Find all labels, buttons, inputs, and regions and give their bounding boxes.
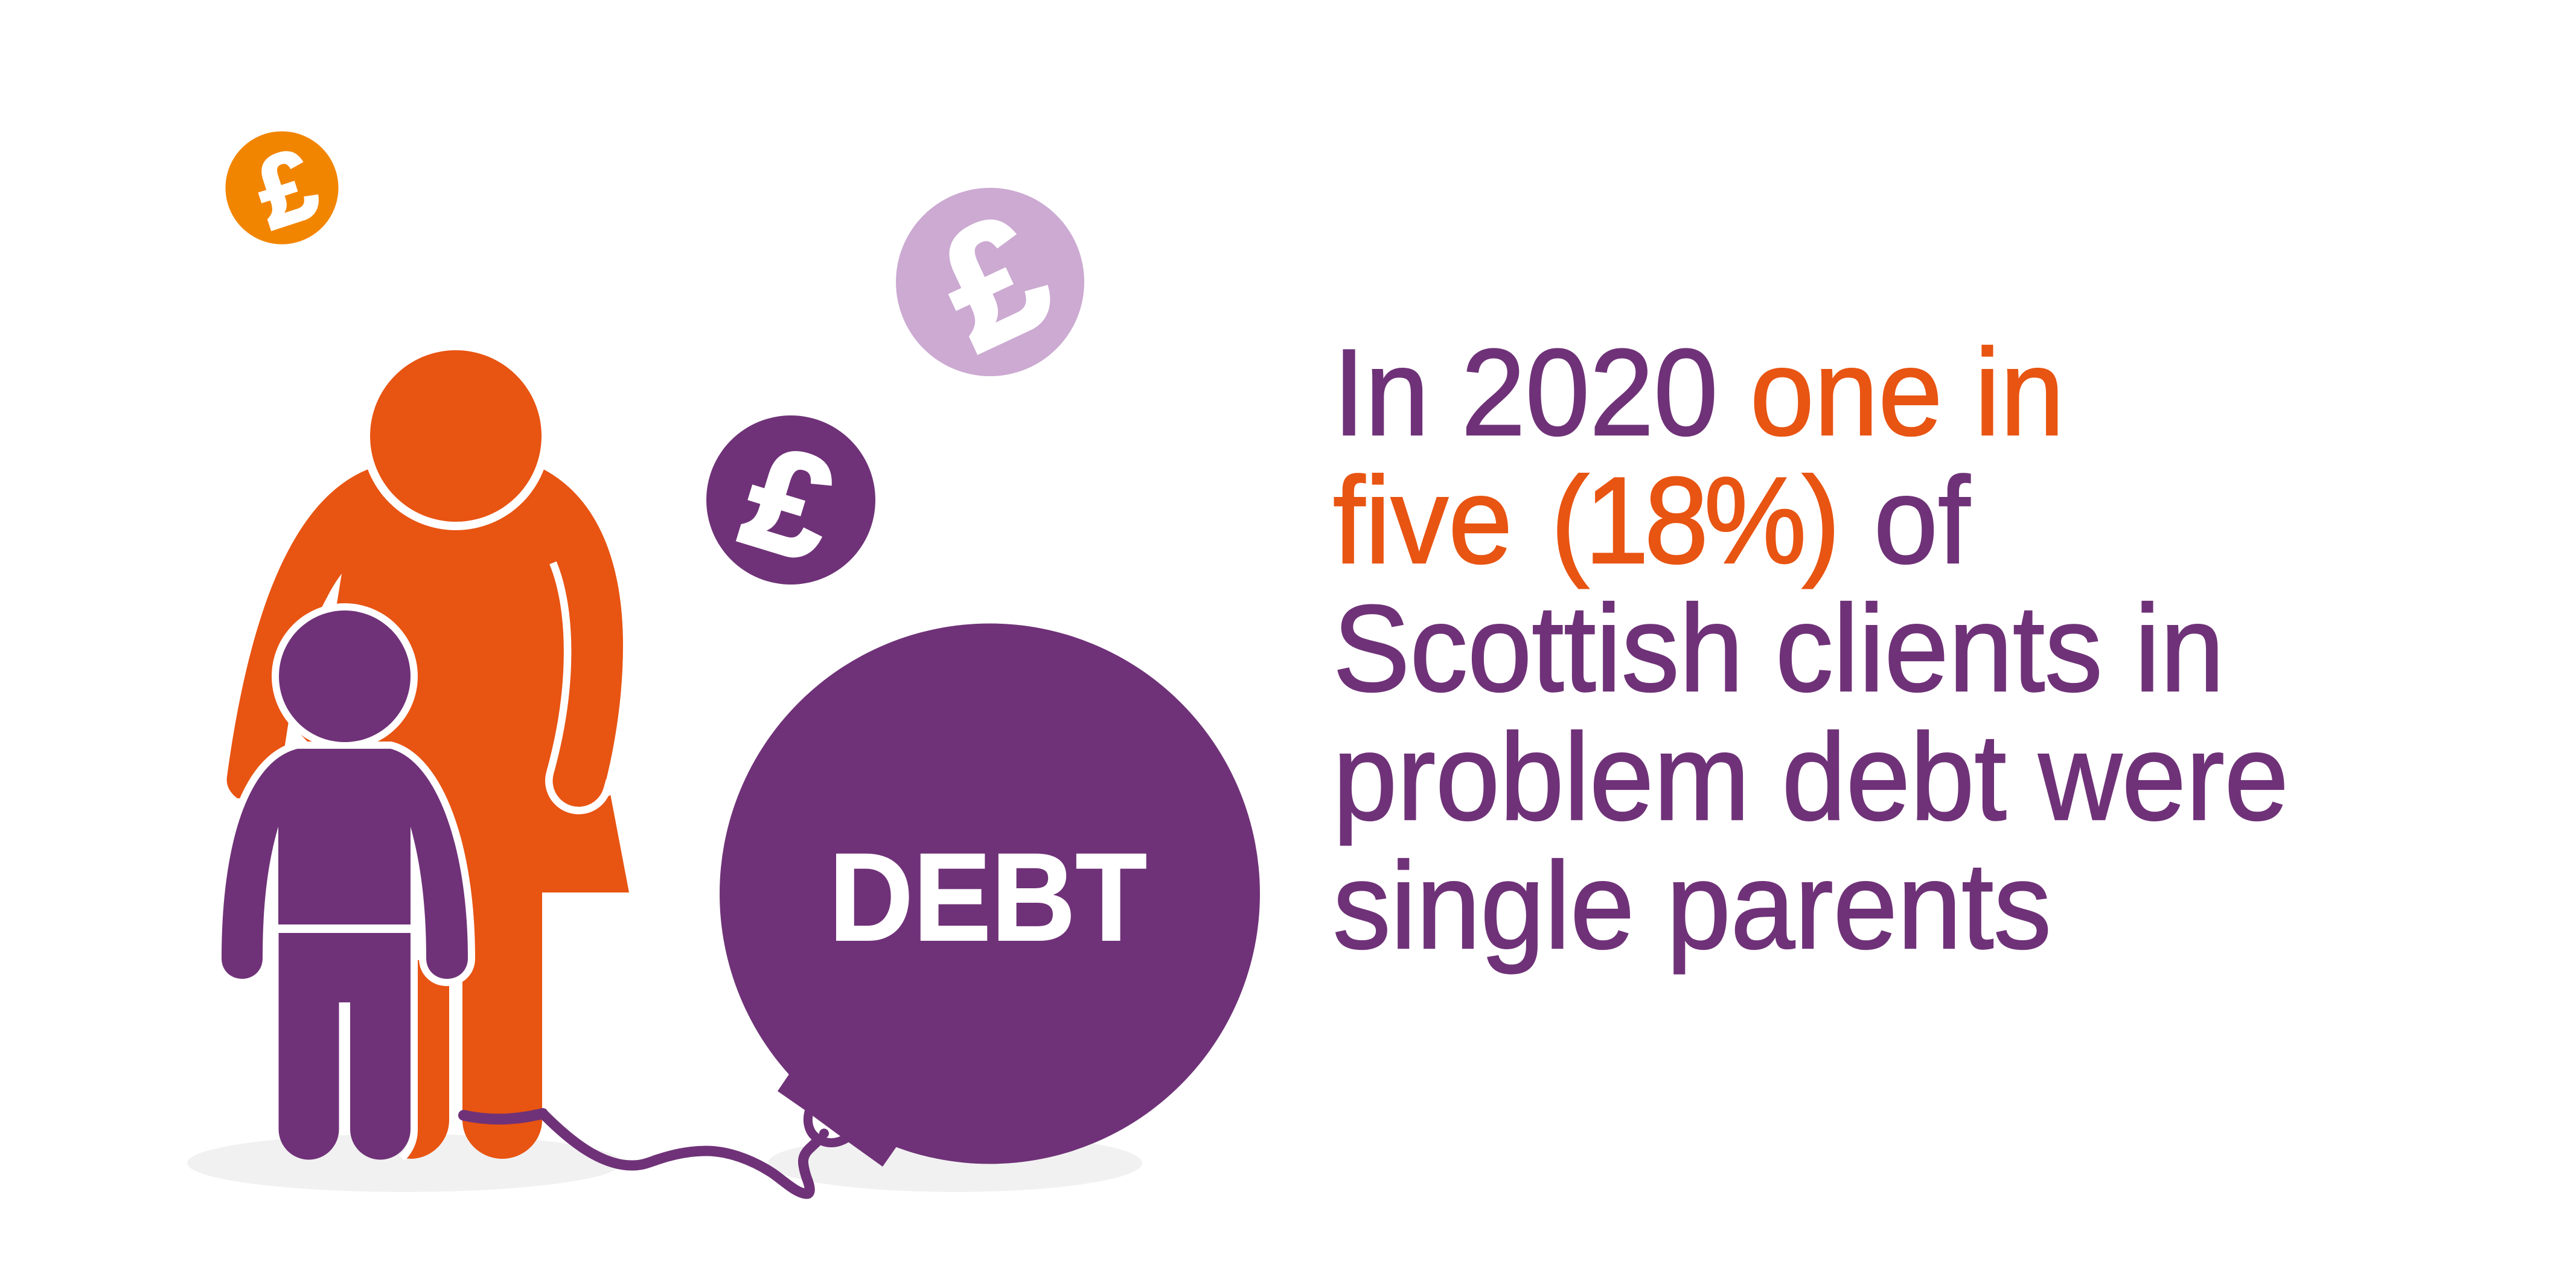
headline text: five (1333, 451, 1512, 589)
headline text (1333, 323, 2289, 974)
ankle chain string (464, 1113, 819, 1194)
icon: orange pound coin: £ (243, 127, 330, 250)
icon: lilac pound coin: £ (913, 178, 1075, 385)
headline text: problem debt were (1333, 708, 2289, 845)
ground shadow: family (187, 1134, 622, 1192)
headline text: (18%) (1551, 451, 1836, 589)
icon: purple pound coin: £ (727, 414, 852, 592)
ball label: DEBT (829, 828, 1147, 967)
debt ball (720, 623, 1260, 1167)
headline text: single parents (1333, 836, 2051, 974)
icon: mother figure (227, 342, 629, 1159)
ground shadow: debt ball (768, 1134, 1142, 1192)
headline text: Scottish clients in (1333, 579, 2225, 717)
headline text: of (1874, 451, 1970, 589)
headline text: In 2020 one in (1333, 323, 2065, 461)
icon: child figure (222, 603, 468, 1159)
